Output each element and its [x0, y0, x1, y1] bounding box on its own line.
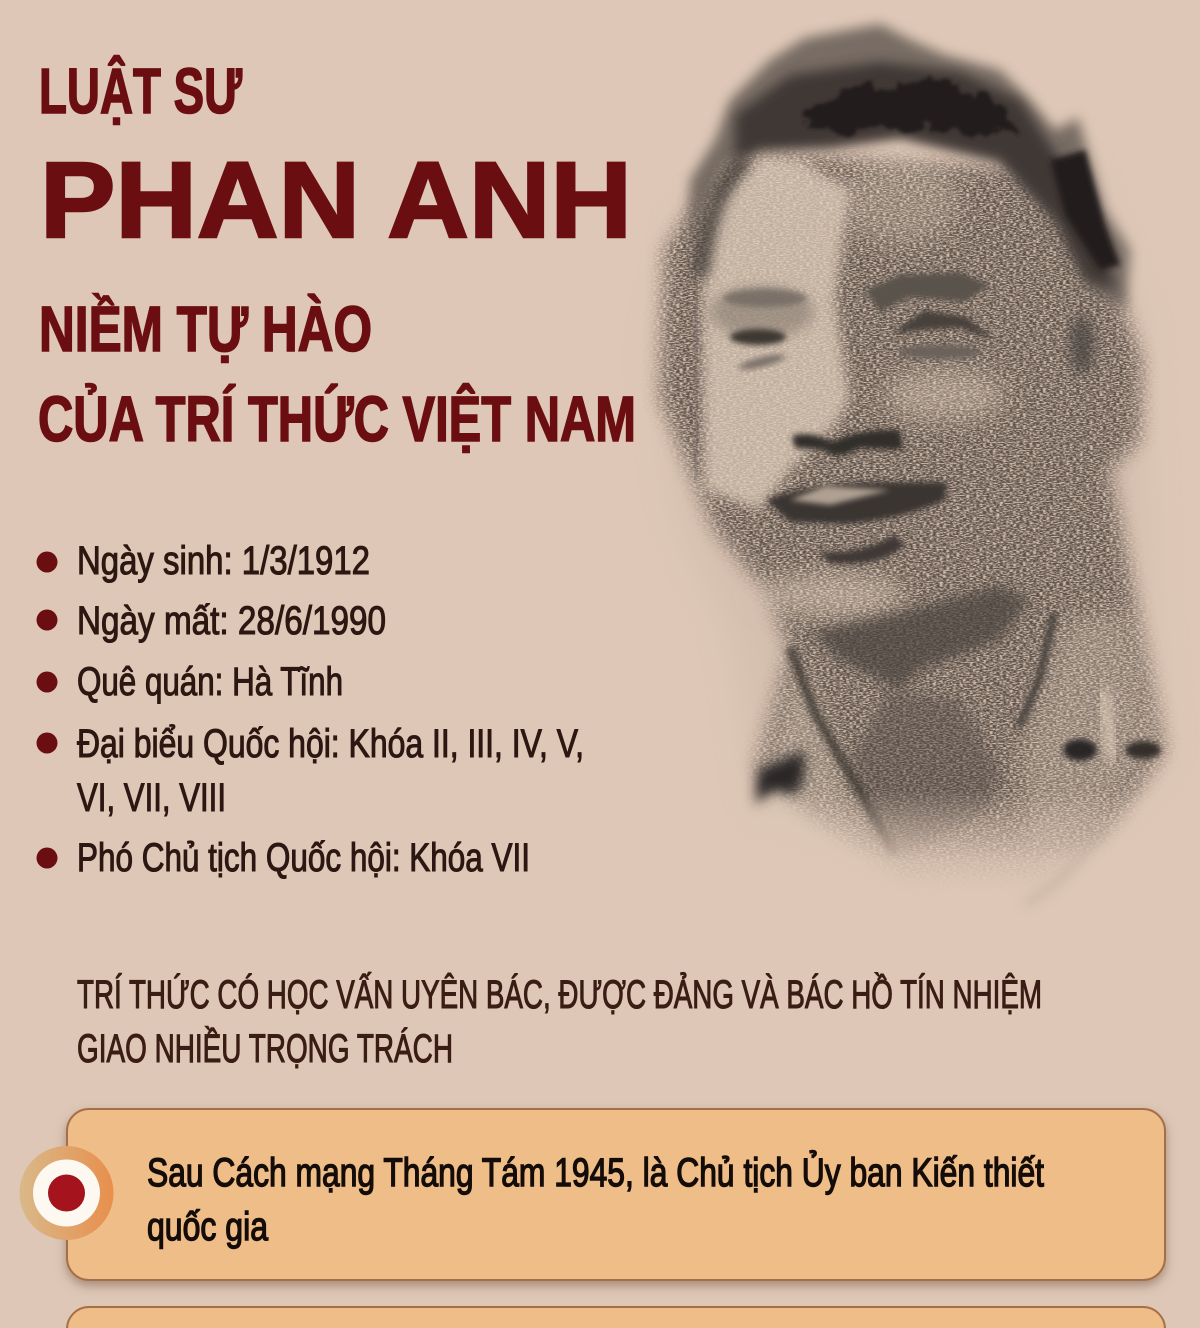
biography list [36, 539, 584, 880]
portrait: mid hair mass [735, 62, 1115, 290]
bullet: National Assembly deputy: VI, VII, VIII [77, 776, 226, 820]
section heading [77, 971, 1042, 1071]
portrait: right under-eye [898, 345, 982, 359]
card text: quốc gia [147, 1205, 269, 1249]
portrait: teeth highlight [790, 486, 890, 505]
card: Chairman of the National Construction Committee [20, 1109, 1165, 1280]
portrait: moustache and mouth [766, 482, 947, 524]
title: Của trí thức Việt Nam: CỦA TRÍ THỨC VIỆT NAM [38, 382, 636, 455]
bullet: death date: Ngày mất: 28/6/1990 [77, 599, 386, 643]
portrait: left temple shadow [700, 160, 745, 275]
portrait: left brow and eye socket [710, 286, 814, 338]
portrait: lower neck shadow [850, 690, 1000, 858]
portrait: fade of chest into background [660, 790, 1200, 920]
portrait: nose [792, 430, 903, 456]
portrait: neck right line [1019, 613, 1054, 727]
title block [38, 54, 636, 455]
bullet: National Assembly deputy [36, 722, 584, 820]
bullet: hometown: Quê quán: Hà Tĩnh [77, 660, 343, 704]
title: Luật sư: LUẬT SƯ [39, 54, 243, 127]
portrait: lit mid forehead [840, 155, 960, 245]
portrait: ear shadow [1070, 315, 1094, 375]
portrait: lit shirt left [760, 660, 900, 870]
bullet: Vice Chairman: Phó Chủ tịch Quốc hội: Khóa VII [77, 836, 530, 880]
portrait: dark hair core [800, 80, 1015, 135]
card: next, cropped at page edge [67, 1307, 1165, 1328]
portrait of Phan Anh [655, 24, 1200, 920]
portrait: dark hair right [1050, 150, 1120, 270]
portrait: lower lip [818, 535, 905, 564]
portrait: left collar shadow [755, 750, 805, 805]
card text [147, 1149, 1044, 1249]
portrait: left under-eye [738, 351, 786, 373]
portrait: outer hair wash [690, 24, 1130, 310]
bullet: National Assembly deputy: Đại biểu Quốc hội: Khóa II, III, IV, V, [77, 722, 584, 766]
portrait: right brow [865, 272, 990, 312]
portrait: left brow [723, 289, 807, 307]
portrait grain: face, neck, shirt [660, 150, 1165, 880]
icon: timeline marker [20, 1146, 114, 1240]
portrait: lit forehead and cheek [702, 155, 850, 510]
portrait: faint collar lines [1025, 830, 1105, 905]
portrait: left eye [730, 329, 786, 345]
portrait: lit right cheek [885, 369, 1005, 421]
portrait: right eye [896, 312, 990, 338]
portrait: right collar shadow [1063, 739, 1097, 761]
title: Phan Anh: PHAN ANH [40, 139, 632, 260]
section heading: GIAO NHIỀU TRỌNG TRÁCH [77, 1025, 453, 1071]
portrait: shoulder shadow [1125, 741, 1161, 759]
portrait: left face edge [695, 250, 697, 480]
portrait: neck shadow [812, 585, 1030, 690]
portrait: lit lower face [755, 573, 905, 617]
portrait: neck left line [790, 647, 895, 855]
title: Niềm tự hào: NIỀM TỰ HÀO [39, 293, 372, 365]
portrait soft halo [655, 160, 1165, 880]
portrait: lit shirt right [1020, 610, 1160, 850]
portrait: shoulder gap [1103, 690, 1113, 760]
bullet: birth date: Ngày sinh: 1/3/1912 [77, 539, 370, 583]
